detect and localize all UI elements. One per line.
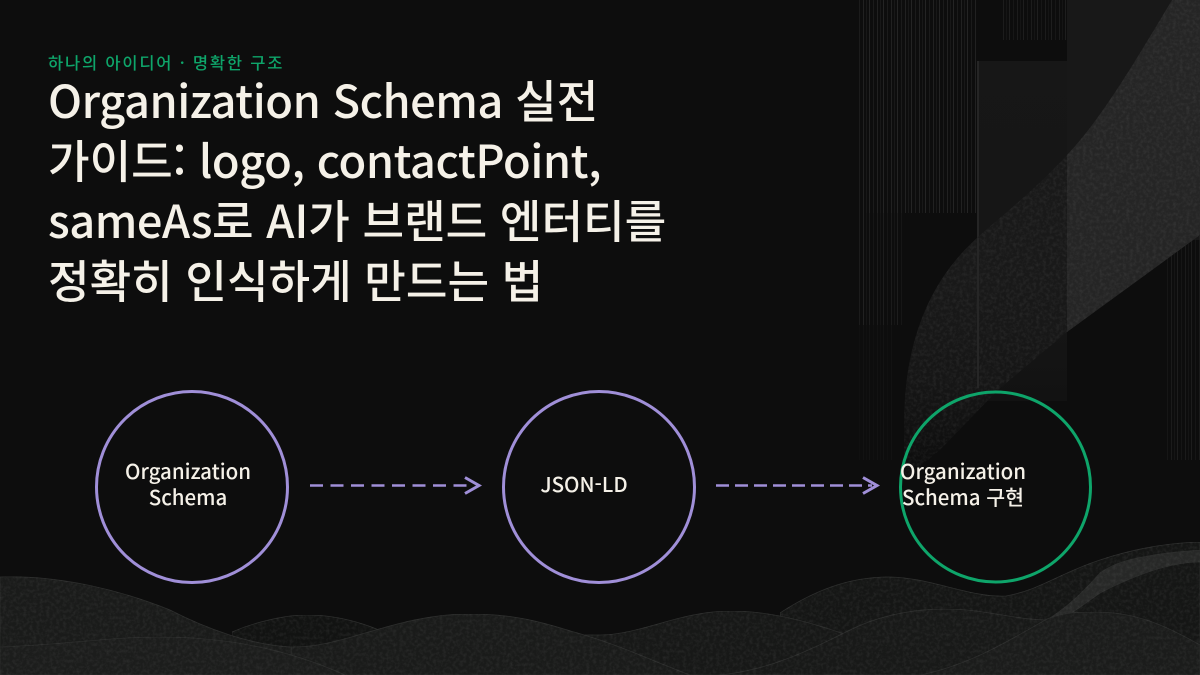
arrow: step 1 to step 2 xyxy=(310,478,479,494)
label: JSON-LD: JSON-LD xyxy=(540,468,628,498)
title: Organization Schema 실전 xyxy=(48,67,598,132)
label: Organization Schema 구현: Organization xyxy=(900,455,1026,485)
label: Organization Schema xyxy=(125,455,251,511)
circle: implementation xyxy=(900,392,1090,582)
label: Organization Schema: Schema xyxy=(149,481,227,511)
title: sameAs로 AI가 브랜드 엔터티를 xyxy=(48,187,666,252)
eyebrow label: 하나의 아이디어 · 명확한 구조 xyxy=(48,50,284,74)
circle: Organization Schema xyxy=(96,392,288,582)
arrow: step 2 to step 3 xyxy=(716,478,877,494)
circle: JSON-LD xyxy=(504,392,694,582)
title: 정확히 인식하게 만드는 법 xyxy=(48,247,543,312)
title: 가이드: logo, contactPoint, xyxy=(48,127,601,192)
label: Organization Schema 구현: Schema 구현 xyxy=(902,481,1024,511)
label: Organization Schema 구현 xyxy=(900,455,1026,511)
title xyxy=(48,67,666,312)
label: Organization Schema: Organization xyxy=(125,455,251,485)
